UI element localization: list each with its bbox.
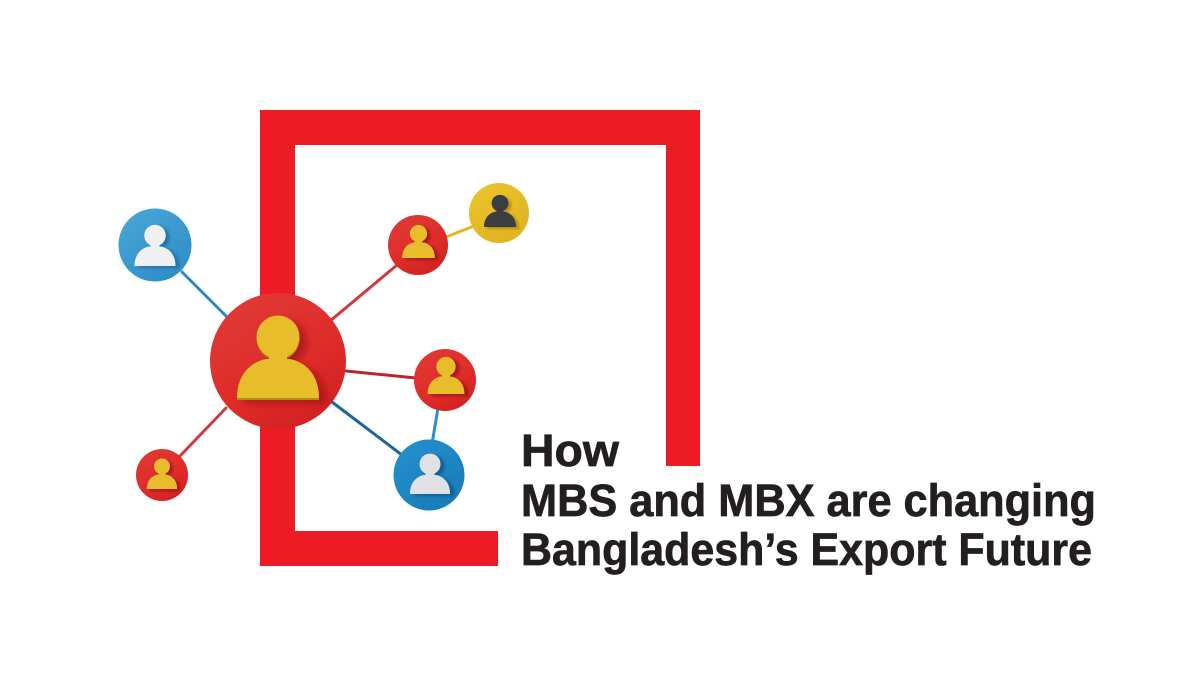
title: MBS and MBX are changing xyxy=(521,475,1096,526)
title: Bangladesh’s Export Future xyxy=(521,524,1092,575)
node: yellow person xyxy=(469,183,529,243)
node: small red person lower left xyxy=(136,449,188,501)
node: red person top xyxy=(388,215,448,275)
node: red person middle xyxy=(414,349,476,411)
title: How xyxy=(521,425,620,476)
network connector lines xyxy=(180,226,474,456)
node: light blue person xyxy=(118,208,192,282)
title xyxy=(521,425,1096,575)
node: deep blue person xyxy=(394,440,464,510)
red square frame xyxy=(260,110,700,566)
node: central red person xyxy=(210,293,346,429)
